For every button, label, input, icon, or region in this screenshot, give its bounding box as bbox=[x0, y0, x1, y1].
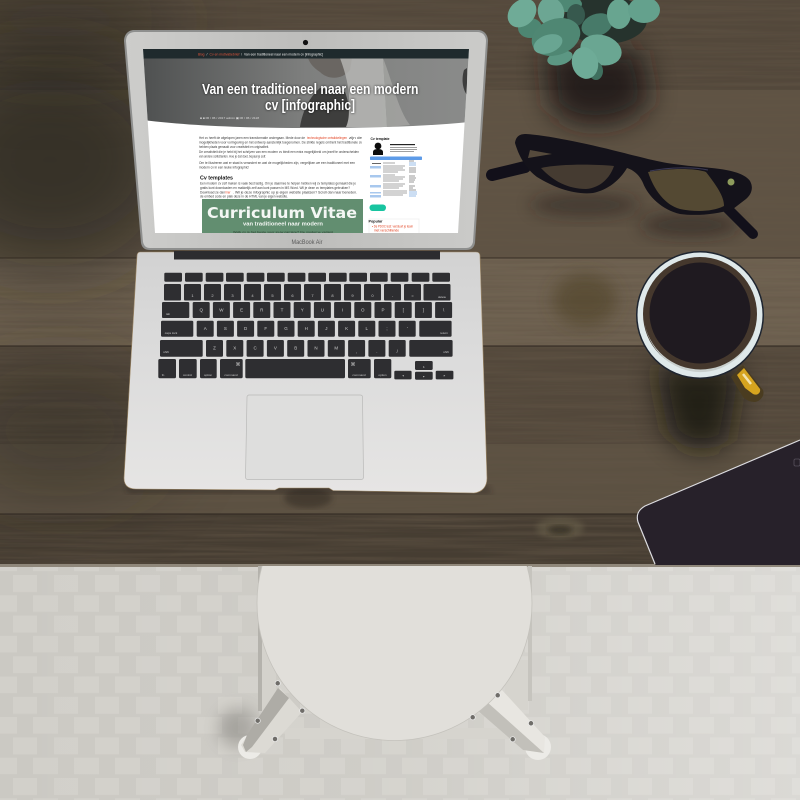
infographic preview banner: Curriculum Vitae bbox=[207, 204, 357, 222]
qwerty key row: U bbox=[321, 308, 324, 312]
trackpad bbox=[246, 395, 364, 480]
hinge bbox=[174, 251, 440, 260]
popular widget: met verschillende bbox=[374, 228, 399, 232]
number key row: 0 bbox=[371, 293, 374, 298]
popular widget: • De PDOC test: verstuurt je team bbox=[372, 224, 413, 228]
laptop shadow bbox=[125, 485, 492, 494]
sidebar: Cv template: Cv template bbox=[370, 137, 390, 141]
number key row: delete bbox=[438, 295, 446, 299]
popular widget bbox=[368, 218, 420, 233]
article intro text: zijn de bbox=[349, 136, 362, 140]
breadcrumb navigation: Blog bbox=[198, 52, 205, 56]
article intro text: hebben plaats gemaakt voor creativiteit en originaliteit. bbox=[199, 145, 269, 149]
number key row: = bbox=[411, 293, 414, 298]
breadcrumb navigation: / bbox=[241, 52, 242, 56]
stool shadow bbox=[218, 708, 258, 748]
cup shadow bbox=[655, 365, 740, 449]
brand label: MacBook Air bbox=[292, 239, 323, 246]
heading: Cv templates: Cv templates bbox=[200, 176, 233, 182]
qwerty key row: Y bbox=[301, 308, 304, 312]
qwerty key row: T bbox=[281, 308, 284, 312]
article intro text: Om te illustreren wat er staat is verandert en wat de mogelijkheden zijn, vergelijken we een traditioneel met een bbox=[199, 161, 355, 165]
breadcrumb navigation bbox=[143, 49, 469, 58]
article intro text bbox=[199, 136, 362, 170]
templates paragraph: de embed code en plak deze in de HTML van je eigen website. bbox=[200, 194, 288, 198]
stool bolts bbox=[255, 681, 534, 742]
number key row: 3 bbox=[231, 293, 234, 298]
infographic preview banner: van traditioneel naar modern bbox=[243, 222, 323, 228]
right stool leg bbox=[477, 690, 551, 760]
article intro text: De creativiteit die je hebt bij het schrijven van een modern cv biedt een extra mogelijkheid om jezelf te onderscheiden bbox=[199, 150, 359, 154]
home key row: L bbox=[366, 326, 369, 331]
page title bbox=[202, 82, 418, 114]
page title: cv [infographic] bbox=[265, 98, 355, 114]
infographic preview banner: Welk cv is het beste voor jouw carrière? De moderne variant bbox=[233, 230, 333, 234]
templates paragraph: Een modern cv zelf maken is vaak best lastig. Om je daarmee te helpen hebben wij cv templates gemaakt die je bbox=[200, 182, 356, 186]
qwerty key row: W bbox=[219, 308, 224, 312]
bottom key row: option bbox=[204, 373, 212, 377]
icon: black glasses bbox=[492, 134, 753, 237]
hero image bbox=[143, 58, 469, 128]
article meta: ■ ■ 06 / 06 / 2017 admin ▣ 06 / 06 / 2118 bbox=[200, 116, 260, 120]
shift key row: C bbox=[253, 346, 257, 350]
bottom key row: option bbox=[378, 373, 387, 377]
breadcrumb navigation: / bbox=[206, 52, 208, 56]
laptop bbox=[124, 30, 488, 493]
shift key row: . bbox=[376, 349, 378, 354]
number key row: 1 bbox=[191, 293, 194, 298]
bottom key row: ▴ bbox=[423, 364, 425, 368]
shift key row: N bbox=[314, 346, 318, 350]
popular widget: Popular bbox=[368, 220, 383, 224]
home key row: return bbox=[440, 331, 448, 335]
qwerty key row: I bbox=[342, 308, 343, 312]
number key row: 2 bbox=[211, 293, 214, 298]
number key row: 9 bbox=[351, 293, 354, 298]
number key row: 7 bbox=[311, 293, 314, 298]
qwerty key row: [ bbox=[403, 308, 405, 312]
shift key row: M bbox=[334, 346, 338, 350]
plant shadow bbox=[545, 50, 650, 125]
home key row: G bbox=[284, 326, 288, 331]
breadcrumb navigation: Cv en motivatiebrief bbox=[210, 52, 240, 56]
left stool leg bbox=[238, 688, 302, 759]
home key row bbox=[161, 321, 452, 337]
article intro text: van andere sollicitanten. Hoe je dat doet, bepaal je zelf. bbox=[199, 154, 266, 158]
bottom key row: control bbox=[183, 373, 192, 377]
stool bbox=[212, 566, 551, 760]
article intro text: technologische ontwikkelingen bbox=[307, 136, 347, 140]
home key row: ; bbox=[386, 326, 388, 331]
home key row: F bbox=[264, 326, 267, 331]
cv thumbnail bbox=[370, 143, 422, 198]
home key row: J bbox=[325, 326, 328, 331]
bottom key row: ⌘ bbox=[350, 362, 356, 368]
laptop screen website bbox=[143, 49, 469, 239]
number key row: 8 bbox=[331, 293, 334, 298]
bottom key row: ▾ bbox=[423, 374, 425, 378]
bottom key row: ◂ bbox=[402, 374, 404, 378]
shift key row: X bbox=[233, 346, 236, 350]
page title: Van een traditioneel naar een modern bbox=[202, 82, 418, 98]
icon: tablet corner bbox=[637, 440, 800, 566]
article intro text: mogelijkheden voor vormgeving en het ontwerp aanzienlijk toegenomen. De strikte regels omtrent het traditionele cv bbox=[199, 140, 362, 144]
sidebar: Cv template bbox=[368, 137, 422, 239]
icon: succulent plant bbox=[502, 0, 660, 82]
qwerty key row: P bbox=[381, 308, 385, 312]
icon: coffee cup bbox=[636, 251, 764, 402]
home key row: S bbox=[224, 326, 227, 331]
qwerty key row: R bbox=[260, 308, 264, 312]
bottom key row: command bbox=[224, 373, 238, 377]
wooden desk background bbox=[0, 0, 800, 566]
number key row: - bbox=[392, 293, 394, 298]
keyboard bbox=[158, 273, 453, 380]
download button bbox=[370, 204, 386, 211]
templates paragraph: hier bbox=[226, 190, 231, 194]
number key row: 5 bbox=[271, 293, 274, 298]
qwerty key row: tab bbox=[166, 312, 170, 316]
number key row: 6 bbox=[291, 293, 294, 298]
number key row bbox=[164, 284, 450, 300]
home key row: K bbox=[345, 326, 348, 331]
breadcrumb navigation: Van een traditioneel naar een modern cv [infographic] bbox=[244, 52, 323, 56]
stool seat bbox=[256, 566, 532, 741]
home key row: caps lock bbox=[165, 331, 178, 335]
infographic preview banner bbox=[202, 199, 363, 235]
shift key row bbox=[160, 340, 453, 357]
shift key row: / bbox=[397, 349, 399, 354]
bottom key row: ▸ bbox=[444, 374, 446, 378]
templates paragraph: . Wil je deze infographic op je eigen website plaatsen? Scroll dan naar beneden. bbox=[233, 190, 357, 194]
shift key row: B bbox=[294, 346, 297, 350]
home key row: H bbox=[305, 326, 308, 331]
qwerty key row: O bbox=[361, 308, 365, 312]
templates paragraph bbox=[200, 182, 357, 198]
bottom key row bbox=[158, 359, 453, 380]
qwerty key row bbox=[162, 302, 452, 318]
templates paragraph: gratis kunt downloaden en makkelijk zelf aan kunt passen in MS Word. Wil je deze cv templates gebruiken? bbox=[200, 186, 350, 190]
article intro text: modern cv in een leuke infographic! bbox=[199, 166, 249, 170]
qwerty key row: ] bbox=[423, 308, 424, 312]
templates paragraph: Download ze dan bbox=[200, 190, 225, 194]
shift key row: , bbox=[356, 349, 357, 354]
home key row: A bbox=[204, 326, 207, 331]
shift key row: Z bbox=[213, 346, 216, 350]
bottom key row: command bbox=[352, 373, 366, 377]
home key row: ' bbox=[407, 326, 408, 331]
laptop base bbox=[124, 252, 487, 493]
shift key row: shift bbox=[443, 350, 449, 354]
qwerty key row: E bbox=[240, 308, 243, 312]
shift key row: V bbox=[274, 346, 277, 350]
qwerty key row: \ bbox=[443, 308, 445, 312]
function key row bbox=[164, 273, 450, 282]
qwerty key row: Q bbox=[199, 308, 203, 312]
stool frame bbox=[258, 566, 532, 739]
laptop lid bbox=[124, 30, 488, 250]
bottom key row: fn bbox=[162, 373, 165, 377]
home key row: D bbox=[244, 326, 248, 331]
number key row: 4 bbox=[251, 293, 254, 298]
shift key row: shift bbox=[163, 350, 169, 354]
article intro text: Het cv heeft de afgelopen jaren een transformatie ondergaan. Mede door de bbox=[199, 136, 305, 140]
floor with woven rug bbox=[0, 564, 800, 800]
bottom key row: ⌘ bbox=[236, 362, 240, 368]
